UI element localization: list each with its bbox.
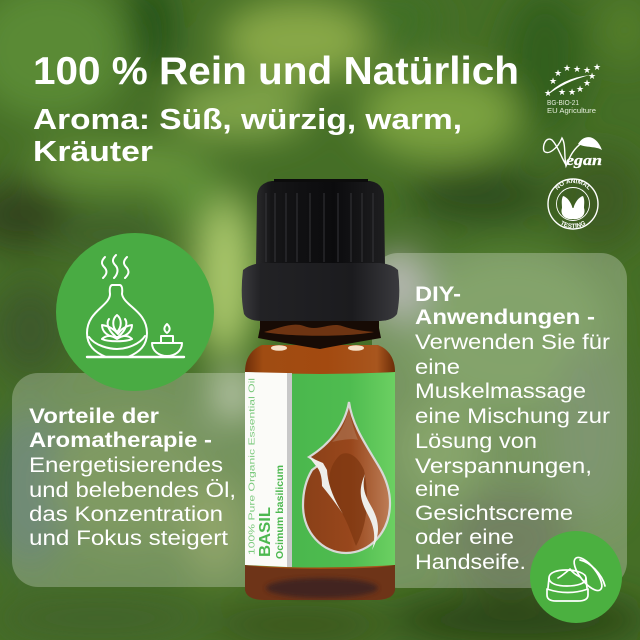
product bottle — [242, 179, 399, 600]
icon circle: aromatherapy diffuser — [56, 233, 214, 391]
text block: aromatherapy benefits: Energetisierendes — [29, 454, 223, 477]
icon: EU organic leaf logo: ★ — [583, 65, 591, 75]
label text: 100% Pure Organic Essential Oil — [246, 378, 256, 555]
subtitle — [33, 104, 462, 168]
icon: EU organic leaf logo: ★ — [554, 68, 562, 78]
text block: DIY uses: eine — [415, 356, 460, 379]
icon: EU organic leaf logo: ★ — [549, 76, 557, 86]
logo caption: EU Agriculture — [547, 106, 596, 115]
text block: DIY uses: Anwendungen - — [415, 306, 595, 329]
icon: no animal testing logo — [547, 178, 599, 230]
logo caption: BG-BIO-21 — [547, 98, 579, 107]
bottle body — [245, 345, 395, 600]
icon circle: cream jar — [530, 531, 622, 623]
text block: DIY uses: Verspannungen, — [415, 455, 592, 478]
text block: DIY uses: Muskelmassage — [415, 380, 586, 403]
title: 100 % Rein und Natürlich — [33, 50, 519, 93]
bottle neck — [258, 320, 381, 349]
logo caption — [547, 98, 596, 115]
cap top — [256, 181, 385, 266]
text block: aromatherapy benefits: und Fokus steigert — [29, 527, 228, 550]
text block: aromatherapy benefits: und belebendes Öl, — [29, 479, 236, 502]
text block: aromatherapy benefits — [29, 405, 236, 550]
icon: EU organic leaf logo: ★ — [573, 64, 581, 74]
logo ring text: NO ANIMAL — [555, 180, 590, 190]
icon: EU organic leaf logo: ★ — [576, 84, 584, 94]
text block: DIY uses: Gesichtscreme — [415, 502, 573, 525]
text block: DIY uses: oder eine — [415, 526, 514, 549]
text block: DIY uses: Lösung von — [415, 430, 537, 453]
icon: EU organic leaf logo: ★ — [558, 87, 566, 97]
icon: EU organic leaf logo: ★ — [568, 87, 576, 97]
text block: DIY uses: DIY- — [415, 283, 461, 306]
label text: Ocimum basilicum — [274, 465, 286, 559]
text block: DIY uses — [415, 283, 610, 574]
text block: aromatherapy benefits: Aromatherapie - — [29, 429, 212, 452]
highlights — [271, 345, 287, 351]
panel: right text box — [372, 253, 627, 588]
vegan wordmark: egan — [566, 153, 602, 169]
label — [245, 372, 395, 568]
cap ribs — [266, 193, 373, 262]
icon: EU organic leaf logo: ★ — [544, 88, 552, 98]
icon: EU organic leaf logo — [544, 62, 601, 115]
text block: DIY uses: Verwenden Sie für — [415, 331, 610, 354]
cap collar — [242, 263, 399, 321]
subtitle: Aroma: Süß, würzig, warm, — [33, 104, 462, 136]
icon: EU organic leaf logo: ★ — [563, 63, 571, 73]
logo ring text: TESTING — [561, 220, 586, 228]
icon: EU organic leaf logo: ★ — [588, 71, 596, 81]
text block: DIY uses: Handseife. — [415, 551, 526, 574]
label droplet — [303, 402, 390, 553]
text block: DIY uses: eine — [415, 478, 460, 501]
logo ring text — [555, 180, 590, 228]
icon: EU organic leaf logo: ★ — [593, 62, 601, 72]
subtitle: Kräuter — [33, 136, 153, 168]
icon: vegan logo — [543, 137, 602, 169]
text block: aromatherapy benefits: Vorteile der — [29, 405, 159, 428]
label text: BASIL — [257, 507, 274, 557]
text block: DIY uses: eine Mischung zur — [415, 405, 610, 428]
icon: EU organic leaf logo: ★ — [583, 78, 591, 88]
label text — [246, 378, 286, 559]
text block: aromatherapy benefits: das Konzentration — [29, 503, 223, 526]
panel: left text box — [12, 373, 382, 587]
